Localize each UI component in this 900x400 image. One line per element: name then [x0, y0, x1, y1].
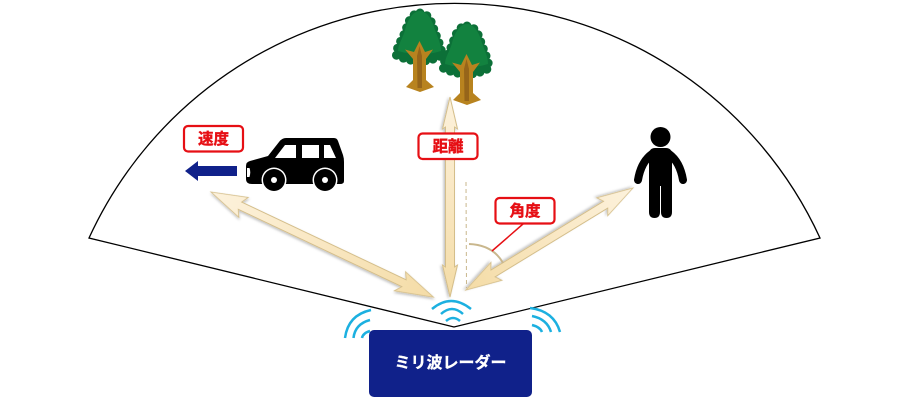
- icon: tree left: [396, 11, 442, 92]
- box: millimeter wave radar: [369, 330, 532, 397]
- arrow: radar to car: [206, 182, 438, 307]
- icon: radio waves center: [432, 301, 471, 321]
- angle arc: [469, 244, 503, 263]
- label: distance: 距離: [432, 138, 464, 156]
- angle reference dashed line: [465, 182, 468, 288]
- label: speed: 速度: [198, 129, 229, 148]
- box: millimeter wave radar: ミリ波レーダー: [394, 353, 507, 372]
- radar detection sector: [89, 3, 820, 327]
- arrow: car direction: [185, 161, 237, 181]
- icon: tree right: [443, 24, 489, 105]
- icon: radio waves left: [345, 310, 371, 338]
- label: speed: [184, 126, 243, 152]
- label: distance: [418, 134, 478, 159]
- label: angle: 角度: [509, 201, 541, 220]
- icon: radio waves right: [530, 308, 560, 332]
- icon: car: [246, 138, 344, 192]
- angle label leader line: [492, 224, 523, 251]
- icon: person: [638, 127, 683, 218]
- label: angle: [496, 198, 554, 224]
- arrow: radar to trees: [442, 97, 458, 297]
- arrow: radar to person: [460, 179, 638, 299]
